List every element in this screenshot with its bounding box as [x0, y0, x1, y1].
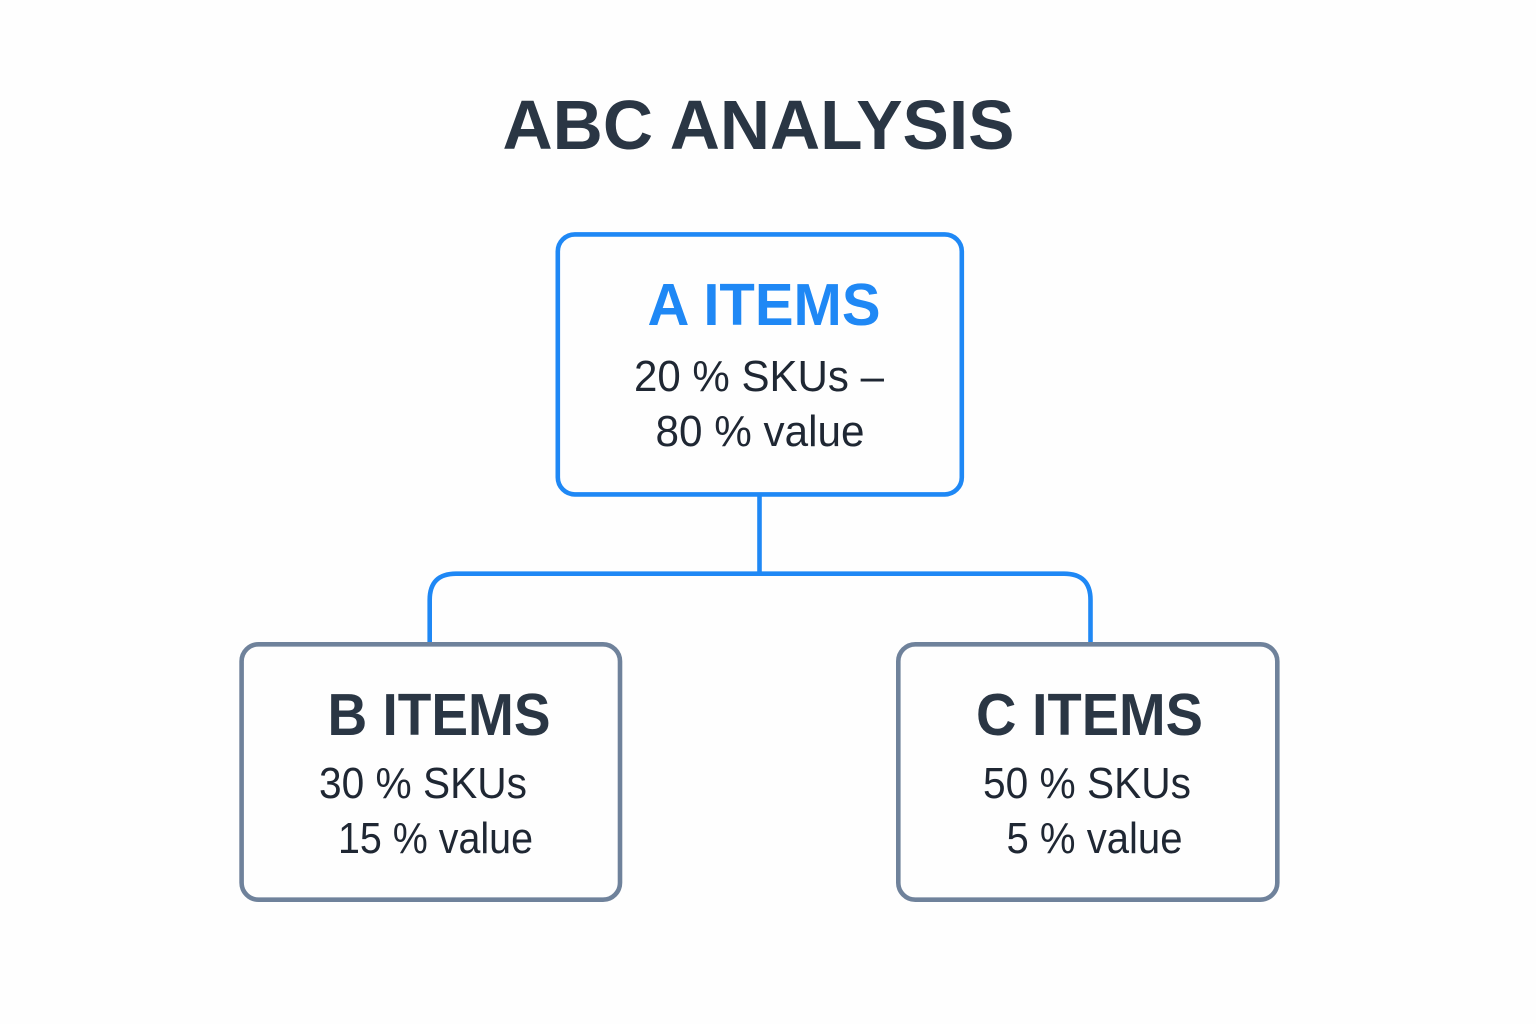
heading: B items: B ITEMS — [328, 682, 550, 748]
heading: A items: A ITEMS — [648, 272, 880, 338]
text: A items stats: 20 % SKUs – — [634, 352, 884, 401]
title: ABC ANALYSIS — [502, 86, 1014, 164]
text: C items stats: 5 % value — [1006, 814, 1182, 863]
text: A items stats — [634, 352, 884, 456]
text: B items stats: 15 % value — [338, 814, 533, 863]
panel: C items — [898, 644, 1277, 900]
text: B items stats: 30 % SKUs — [319, 759, 527, 808]
text: C items stats — [983, 759, 1191, 863]
heading: C items: C ITEMS — [976, 682, 1203, 748]
panel: A items — [558, 234, 962, 494]
text: A items stats: 80 % value — [656, 407, 864, 456]
text: B items stats — [319, 759, 533, 863]
text: C items stats: 50 % SKUs — [983, 759, 1191, 808]
connector: tree lines — [430, 495, 1090, 644]
panel: B items — [242, 644, 620, 900]
